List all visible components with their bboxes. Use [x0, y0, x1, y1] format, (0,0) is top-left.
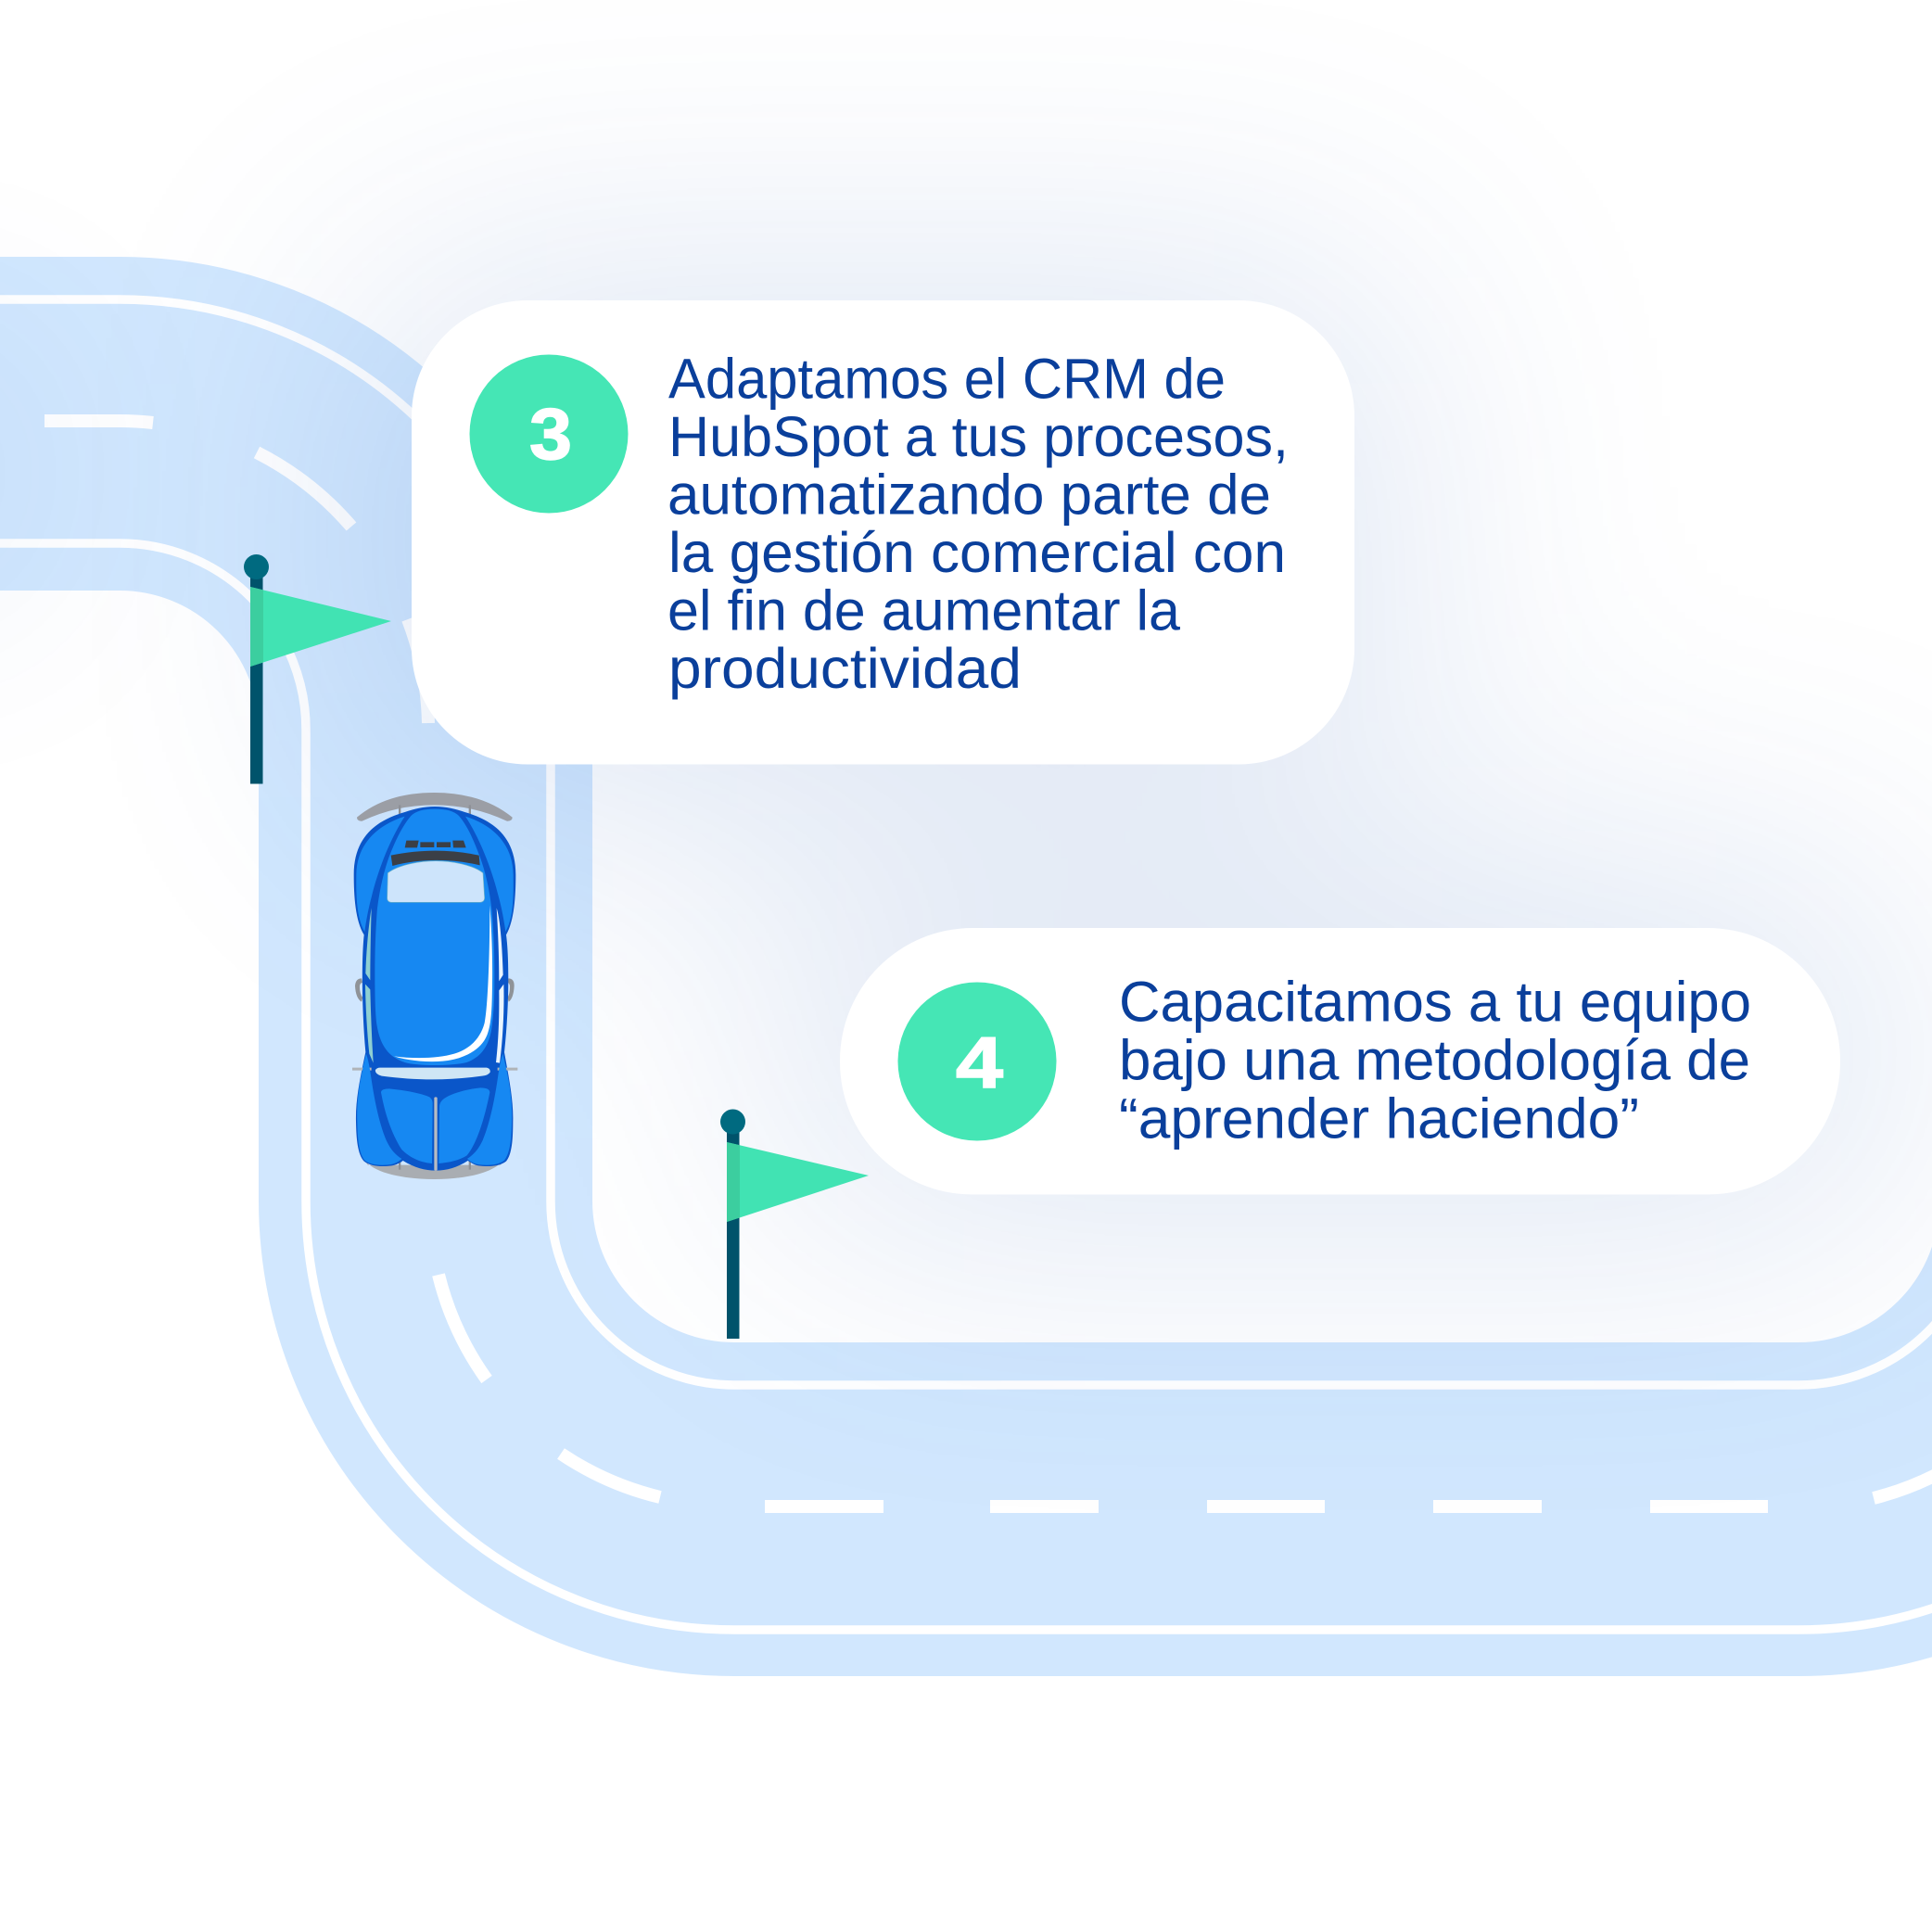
flag pole — [727, 1125, 740, 1339]
rear fenders — [356, 817, 514, 932]
road inner edge line — [0, 543, 1932, 1630]
number badge 4: 4 — [956, 1022, 1003, 1103]
flag 4 — [720, 1109, 869, 1339]
roof highlight — [394, 906, 492, 1061]
car — [352, 793, 517, 1179]
road outer edge line — [0, 299, 1932, 1385]
text block step 3: HubSpot a tus procesos, — [668, 405, 1289, 468]
road centre dashes — [44, 421, 1932, 1506]
flag 3 — [244, 554, 391, 784]
engine vents — [405, 841, 466, 847]
rear dark bar — [391, 851, 480, 866]
flag pole — [250, 570, 263, 784]
flag pennant — [727, 1142, 869, 1222]
panel: step 3 card — [412, 300, 1354, 764]
number badge 3 — [469, 354, 629, 514]
text block step 3: productividad — [668, 637, 1022, 700]
text block step 3: Adaptamos el CRM de — [668, 347, 1226, 410]
text block step 3: el fin de aumentar la — [667, 578, 1180, 642]
text block step 4: “aprender haciendo” — [1119, 1087, 1639, 1150]
hood centre strip — [434, 1097, 438, 1171]
car rear spoiler — [357, 793, 513, 821]
text block step 3: la gestión comercial con — [668, 521, 1286, 584]
text block step 4: Capacitamos a tu equipo — [1119, 970, 1751, 1033]
number badge 4 — [897, 983, 1057, 1140]
bumper struts — [399, 1161, 471, 1170]
right side windows — [496, 908, 503, 1063]
rear window — [388, 861, 485, 902]
roof and trunk — [375, 809, 494, 1065]
spoiler struts — [399, 805, 471, 814]
panel: step 4 card — [840, 928, 1840, 1194]
windshield — [375, 1068, 490, 1079]
road surface — [0, 424, 1932, 1509]
pennant overlap on pole — [727, 1142, 740, 1222]
soft shadow glow behind cards — [371, 278, 1891, 1224]
text block step 3: automatizando parte de — [667, 464, 1271, 527]
front bumper — [361, 1154, 506, 1179]
road — [0, 299, 1932, 1630]
flag ball — [244, 554, 269, 579]
card background — [840, 928, 1840, 1194]
car body — [354, 807, 515, 1171]
hood panels — [381, 1087, 489, 1163]
text block step 4: bajo una metodología de — [1119, 1029, 1750, 1092]
mirrors — [355, 978, 515, 1002]
number badge 3: 3 — [529, 393, 572, 475]
soft glow at left edge — [0, 315, 56, 630]
front fenders — [357, 1054, 512, 1165]
card background — [412, 300, 1354, 764]
left side windows — [365, 908, 374, 1063]
flag ball — [720, 1109, 745, 1135]
flag pennant — [250, 587, 391, 667]
wipers — [352, 1068, 517, 1071]
pennant overlap on pole — [250, 587, 263, 667]
